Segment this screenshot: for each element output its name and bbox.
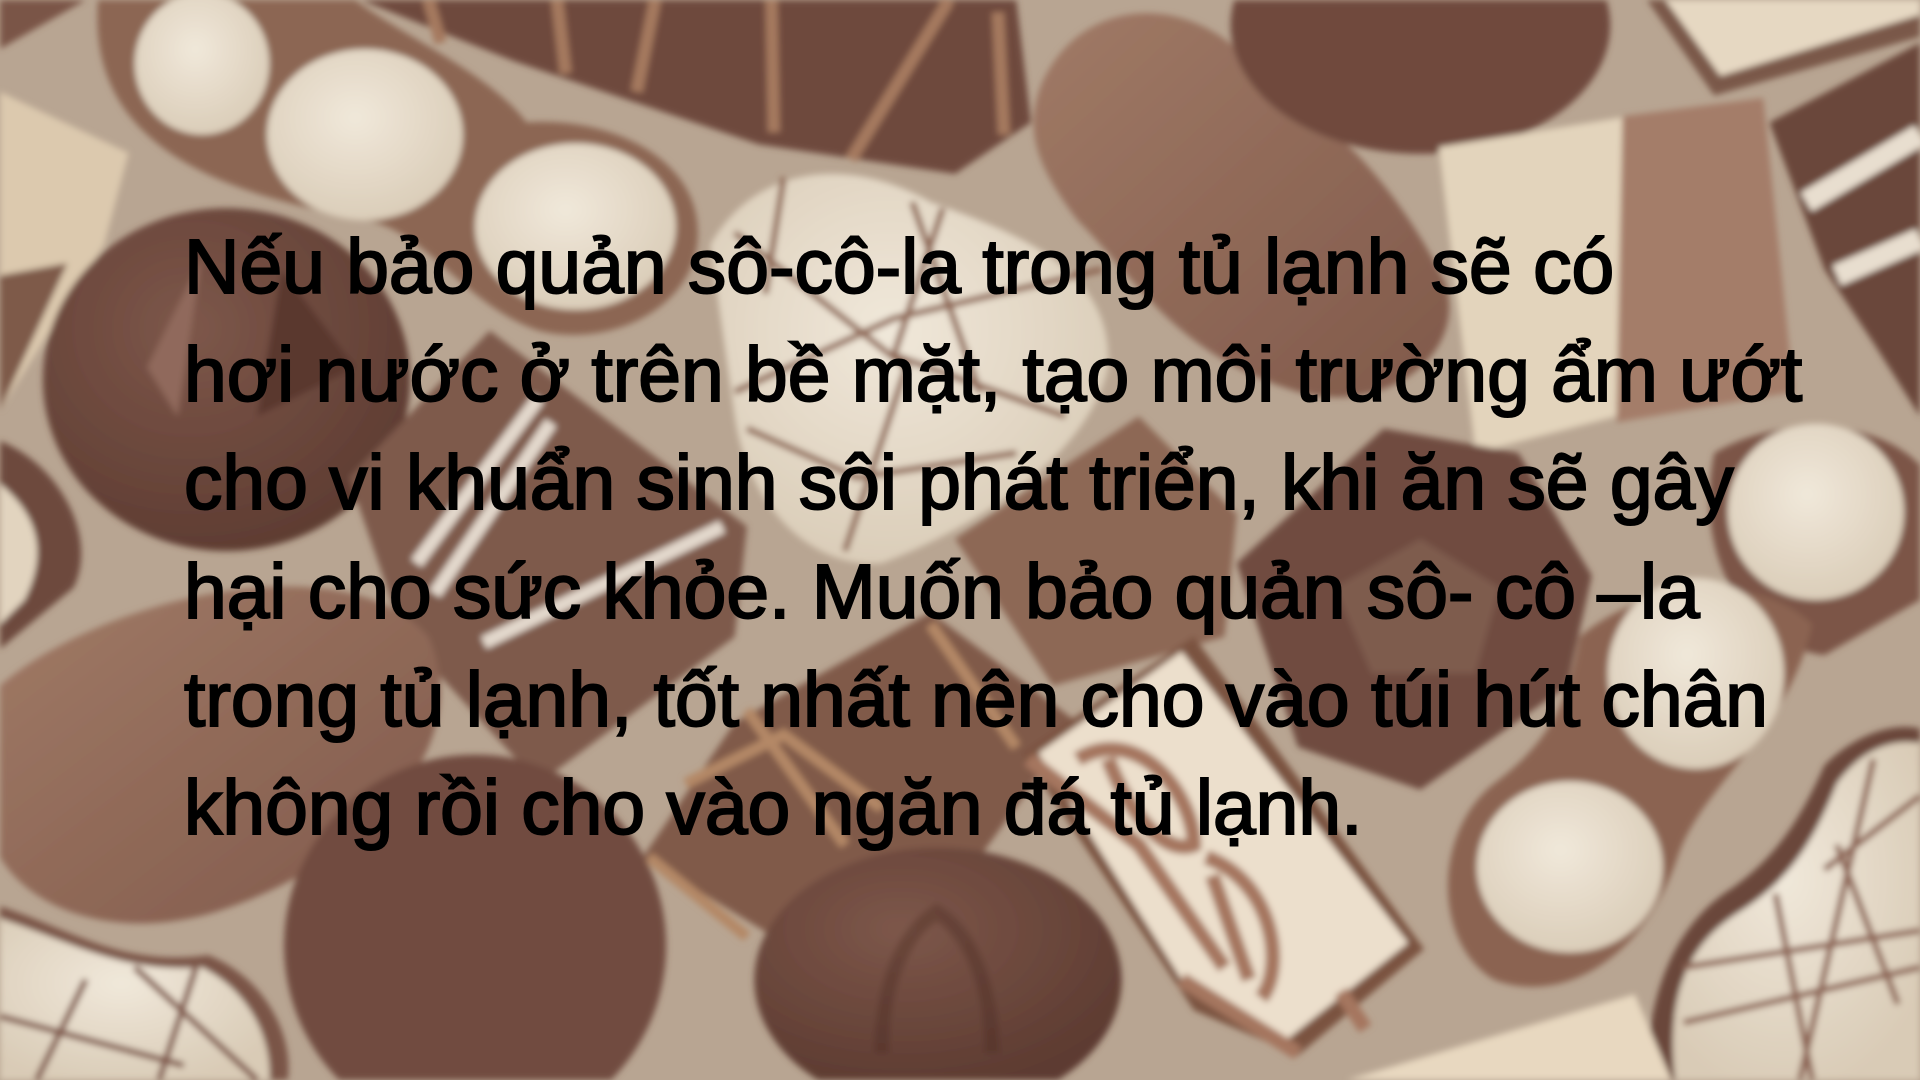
chocolate: left cream block <box>0 92 129 410</box>
chocolate: top dark dome <box>1231 0 1610 154</box>
chocolate: bottom-left lattice <box>0 906 289 1080</box>
line 4: hại cho sức khỏe. Muốn bảo quản sô- cô –la <box>184 549 1700 635</box>
line 6: không rồi cho vào ngăn đá tủ lạnh. <box>184 765 1362 851</box>
chocolate: dark dome bottom <box>754 848 1122 1080</box>
line 5: trong tủ lạnh, tốt nhất nên cho vào túi hút chân <box>184 657 1768 743</box>
chocolate: bottom-right lattice <box>1647 727 1920 1080</box>
chocolate: right dumbbell <box>1448 578 1812 987</box>
chocolate: white lattice <box>710 174 1108 564</box>
chocolate: left milk ovoid <box>0 587 440 923</box>
chocolate: large milk bean <box>1034 13 1449 397</box>
line 3: cho vi khuẩn sinh sôi phát triển, khi ăn sẽ gây <box>184 440 1734 526</box>
chocolate: right stripe <box>1769 43 1920 416</box>
chocolate: dark swirl <box>43 208 410 551</box>
chocolate: right white dome <box>1709 424 1920 655</box>
chocolate: left edge <box>0 441 81 649</box>
line 2: hơi nước ở trên bề mặt, tạo môi trường ẩm ướt <box>184 332 1802 418</box>
chocolate: top bar <box>361 0 1031 174</box>
chocolate: top-left corner <box>0 0 86 49</box>
chocolate: top-left dumbbell <box>97 0 698 335</box>
chocolate: bottom cream bar <box>1347 994 1671 1080</box>
chocolate: centre milk bars <box>643 416 1237 943</box>
chocolate: two-tone square <box>1439 98 1794 453</box>
chocolate: drizzled cream bar <box>1022 637 1424 1056</box>
chocolate: dark round <box>284 755 666 1080</box>
chocolate: striped dark <box>349 331 747 784</box>
chocolate: hex dark <box>1237 429 1592 790</box>
chocolate: top-right cream <box>1647 0 1920 96</box>
line 1: Nếu bảo quản sô-cô-la trong tủ lạnh sẽ có <box>184 224 1614 310</box>
